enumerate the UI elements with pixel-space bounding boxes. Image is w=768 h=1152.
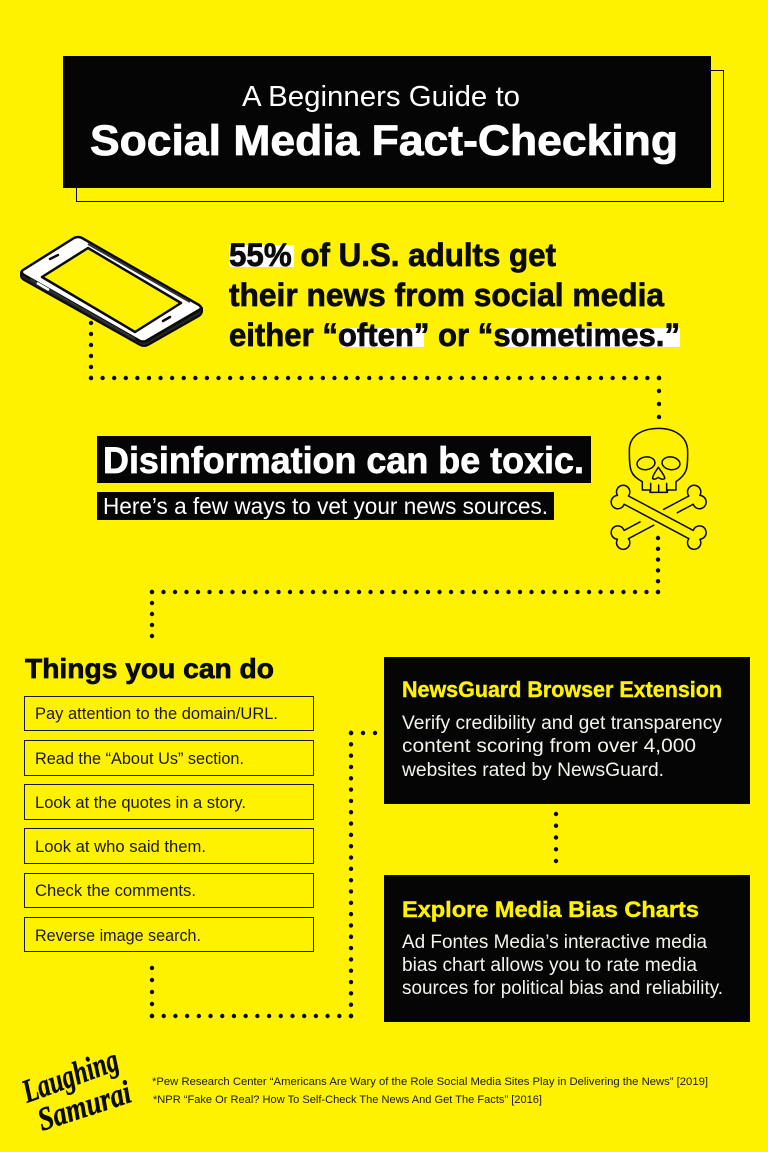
disinformation banner: Here’s a few ways to vet your news sources. bbox=[103, 493, 548, 519]
panel: NewsGuard: content scoring from over 4,000 bbox=[402, 736, 696, 757]
title banner bbox=[63, 56, 724, 202]
headline statistic: 55% of U.S. adults get bbox=[229, 237, 556, 273]
checklist bbox=[24, 696, 314, 952]
logo: Laughing Samurai bbox=[17, 1042, 136, 1139]
panel: NewsGuard bbox=[384, 657, 750, 804]
icon: smartphone bbox=[21, 237, 202, 346]
disinformation banner: Disinformation can be toxic. bbox=[103, 440, 584, 481]
panel: NewsGuard: Verify credibility and get transparency bbox=[402, 713, 722, 734]
checklist: Read the “About Us” section. bbox=[35, 750, 244, 768]
checklist: Check the comments. bbox=[35, 882, 196, 900]
checklist: Look at the quotes in a story. bbox=[35, 794, 246, 812]
footnotes bbox=[152, 1076, 708, 1106]
checklist: Look at who said them. bbox=[35, 838, 206, 856]
icon: skull and crossbones bbox=[609, 428, 709, 552]
logo: Laughing Samurai: Laughing bbox=[17, 1042, 124, 1111]
headline statistic bbox=[229, 237, 680, 353]
checklist: Pay attention to the domain/URL. bbox=[35, 705, 278, 723]
panel: Media Bias Charts: sources for political bias and reliability. bbox=[402, 978, 723, 999]
title banner: Social Media Fact-Checking bbox=[90, 117, 678, 165]
dotted connector: phone to skull bbox=[89, 323, 661, 419]
checklist: Reverse image search. bbox=[35, 927, 201, 945]
disinformation banner bbox=[97, 436, 591, 520]
panel: Media Bias Charts: Explore Media Bias Charts bbox=[402, 897, 699, 922]
heading: things you can do: Things you can do bbox=[25, 653, 274, 684]
title banner: A Beginners Guide to bbox=[242, 81, 520, 113]
dotted connector: checklist to panels bbox=[150, 731, 377, 1018]
footnotes: *NPR “Fake Or Real? How To Self-Check The News And Get The Facts” [2016] bbox=[153, 1094, 542, 1106]
logo: Laughing Samurai: Samurai bbox=[33, 1074, 136, 1139]
panel: Media Bias Charts: Ad Fontes Media’s interactive media bbox=[402, 932, 707, 953]
dotted connector: between panels bbox=[554, 814, 558, 863]
headline statistic: their news from social media bbox=[229, 277, 664, 313]
headline statistic: either “often” or “sometimes.” bbox=[229, 317, 680, 353]
panel: NewsGuard: websites rated by NewsGuard. bbox=[401, 760, 664, 781]
footnotes: *Pew Research Center “Americans Are Wary of the Role Social Media Sites Play in Delivering the News” [2019] bbox=[152, 1076, 708, 1088]
panel: Media Bias Charts bbox=[384, 875, 750, 1022]
panel: Media Bias Charts: bias chart allows you to rate media bbox=[402, 955, 697, 976]
panel: NewsGuard: NewsGuard Browser Extension bbox=[402, 677, 722, 702]
dotted connector: skull to tips bbox=[150, 538, 660, 638]
